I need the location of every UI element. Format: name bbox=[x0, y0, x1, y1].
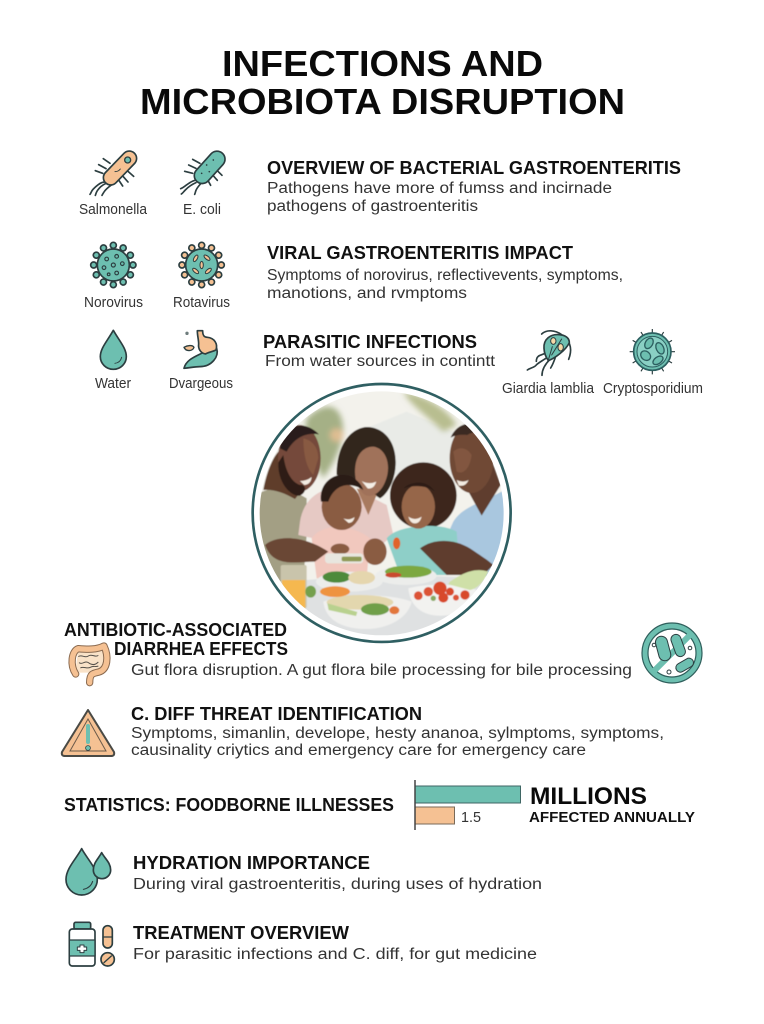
label: Norovirus: Norovirus bbox=[84, 294, 143, 311]
label: Giardia lamblia: Giardia lamblia bbox=[502, 380, 595, 397]
title: INFECTIONS AND bbox=[222, 43, 543, 84]
icon: Norovirus bbox=[91, 242, 136, 288]
small orange plate bbox=[320, 586, 350, 597]
text: viral body bbox=[267, 267, 623, 302]
bar chart bbox=[415, 780, 520, 830]
title: MICROBIOTA DISRUPTION bbox=[140, 81, 625, 122]
photo: family sharing a meal in a circular frame bbox=[250, 384, 511, 645]
arms bbox=[265, 538, 328, 563]
heading: overview of bacterial gastroenteritis: OVERVIEW OF BACTERIAL GASTROENTERITIS bbox=[267, 158, 681, 178]
icon: warning triangle bbox=[62, 710, 114, 756]
icon: hydration drops bbox=[66, 849, 111, 895]
heading: hydration importance: HYDRATION IMPORTANCE bbox=[133, 853, 370, 873]
child in teal bbox=[390, 462, 457, 529]
man right body bbox=[450, 491, 504, 576]
stat: millions affected annually: AFFECTED ANNUALLY bbox=[529, 810, 695, 826]
icon: E. coli bbox=[181, 148, 228, 194]
icon: Cryptosporidium bbox=[630, 329, 675, 374]
text: parasitic body: From water sources in contintt bbox=[265, 353, 496, 370]
text: overview body: Pathogens have more of fumss and incirnade bbox=[267, 180, 612, 197]
text: c. diff body: Symptoms, simanlin, develope, hesty ananoa, sylmptoms, symptoms, bbox=[131, 725, 664, 742]
heading: statistics foodborne illnesses: STATISTICS: FOODBORNE ILLNESSES bbox=[64, 795, 394, 815]
front bowl bbox=[323, 595, 412, 629]
heading: antibiotic-associated diarrhea effects: ANTIBIOTIC-ASSOCIATED bbox=[64, 620, 287, 640]
label: Water: Water bbox=[95, 375, 131, 392]
icon: Rotavirus bbox=[179, 242, 224, 288]
icon: water drop bbox=[100, 330, 126, 369]
tomato bowl bbox=[408, 585, 477, 616]
text: c. diff body bbox=[131, 725, 664, 759]
heading: antibiotic-associated diarrhea effects: DIARRHEA EFFECTS bbox=[114, 639, 288, 659]
heading: treatment overview: TREATMENT OVERVIEW bbox=[133, 923, 349, 943]
title bbox=[140, 43, 625, 122]
icon: no bacteria bbox=[642, 623, 702, 683]
man left body bbox=[257, 489, 307, 582]
icon: intestine bbox=[72, 646, 107, 683]
stat: millions affected annually: MILLIONS bbox=[530, 783, 647, 810]
text: overview body bbox=[267, 180, 612, 215]
plate 2 bbox=[380, 570, 437, 585]
heading: parasitic infections: PARASITIC INFECTIONS bbox=[263, 332, 477, 352]
text: c. diff body: causinality criytics and emergency care for emergency care bbox=[131, 742, 586, 759]
bar chart: 1.5 bbox=[461, 809, 481, 826]
icon: medicine bottle and pills bbox=[69, 922, 114, 966]
woman bbox=[337, 427, 396, 498]
text: hydration body: During viral gastroenteritis, during uses of hydration bbox=[133, 876, 542, 893]
label: Cryptosporidium: Cryptosporidium bbox=[603, 380, 703, 397]
green side bbox=[448, 570, 488, 590]
heading: antibiotic-associated diarrhea effects bbox=[64, 620, 288, 659]
plate 1 bbox=[316, 572, 383, 592]
text: viral body: manotions, and rvmptoms bbox=[267, 285, 467, 302]
child in pink bbox=[312, 527, 370, 578]
stat: millions affected annually bbox=[529, 783, 695, 826]
text: viral body: Symptoms of norovirus, reflectivevents, symptoms, bbox=[267, 267, 623, 284]
label: Dvargeous: Dvargeous bbox=[169, 375, 233, 392]
label: E. coli: E. coli bbox=[183, 201, 221, 218]
label: Salmonella: Salmonella bbox=[79, 201, 148, 218]
text: antibiotic body: Gut flora disruption. A gut flora bile processing for bile processing bbox=[131, 662, 632, 679]
icon: stomach bbox=[184, 331, 217, 368]
table bbox=[305, 576, 484, 636]
label: Rotavirus: Rotavirus bbox=[173, 294, 230, 311]
text: overview body: pathogens of gastroenteritis bbox=[267, 198, 478, 215]
heading: c. diff threat identification: C. DIFF THREAT IDENTIFICATION bbox=[131, 704, 422, 724]
juice bbox=[281, 565, 307, 608]
text: treatment body: For parasitic infections and C. diff, for gut medicine bbox=[133, 946, 537, 963]
icon: Salmonella bbox=[90, 148, 140, 195]
heading: viral gastroenteritis impact: VIRAL GASTROENTERITIS IMPACT bbox=[267, 243, 573, 263]
icon: Giardia lamblia bbox=[527, 331, 571, 375]
